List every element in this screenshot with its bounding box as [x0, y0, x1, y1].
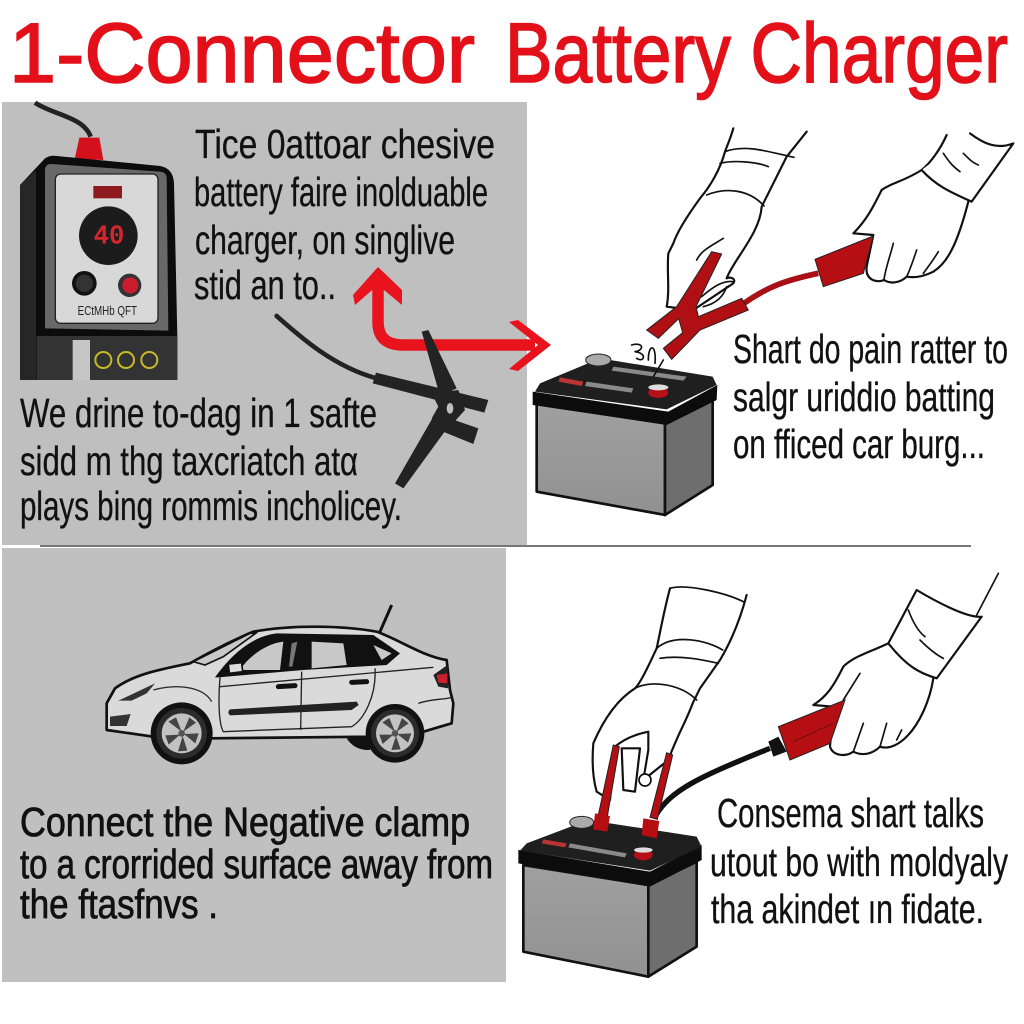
- icon: right gloved hand: [813, 643, 933, 755]
- text: connect negative clamp: [20, 799, 493, 927]
- icon: right hand: [853, 135, 968, 282]
- icon: battery charger: ECtMHb QFT: [78, 303, 137, 318]
- icon: bottom battery: [523, 865, 648, 977]
- icon: car body: [107, 627, 453, 738]
- text: top description: Tice 0attoar chesive: [195, 121, 495, 167]
- title: 1-Connector: [9, 6, 475, 100]
- illustration: hands on battery: [518, 573, 998, 977]
- text: left lower description: [20, 390, 402, 529]
- icon: red cable and clamp: [742, 273, 818, 305]
- text: left lower description: plays bing rommis incholicey.: [20, 483, 402, 529]
- illustration: hands clamping positive terminal: [533, 128, 1013, 515]
- text: top description: stid an to..: [194, 262, 336, 308]
- text: top description: charger, on singlive: [195, 217, 455, 263]
- icon: top battery: [537, 403, 665, 515]
- text: top right description: [733, 326, 1008, 467]
- text: left lower description: sidd m thg taxcriatch atα: [20, 438, 358, 484]
- icon: red clamp jaws: [598, 745, 619, 817]
- text: top description: [194, 121, 495, 308]
- panel: top left background: [2, 102, 527, 545]
- text: top description: battery faire inolduable: [194, 169, 488, 215]
- arrow: red bent arrow: [353, 267, 551, 371]
- icon: battery charger: [20, 103, 177, 380]
- icon: left gloved hand: [593, 588, 747, 800]
- title: [9, 6, 1008, 100]
- text: connect negative clamp: the ftasfnvs .: [20, 881, 218, 927]
- icon: antenna: [380, 605, 392, 632]
- icon: left hand: [667, 128, 807, 310]
- panel: bottom left background: [2, 548, 506, 982]
- divider: [40, 545, 971, 547]
- icon: front wheel: [151, 702, 213, 764]
- text: bottom right description: [710, 790, 1008, 932]
- text: left lower description: We drine to-dag in 1 safte: [20, 390, 377, 436]
- icon: black cable and red handle: [655, 748, 770, 817]
- icon: battery charger: 40: [94, 222, 124, 252]
- text: connect negative clamp: to a crorrided surface away from: [20, 841, 493, 887]
- text: connect negative clamp: Connect the Negative clamp: [20, 799, 470, 845]
- icon: rear wheel: [366, 704, 424, 763]
- illustration: car: [107, 605, 453, 764]
- icon: black clamp: [277, 316, 488, 488]
